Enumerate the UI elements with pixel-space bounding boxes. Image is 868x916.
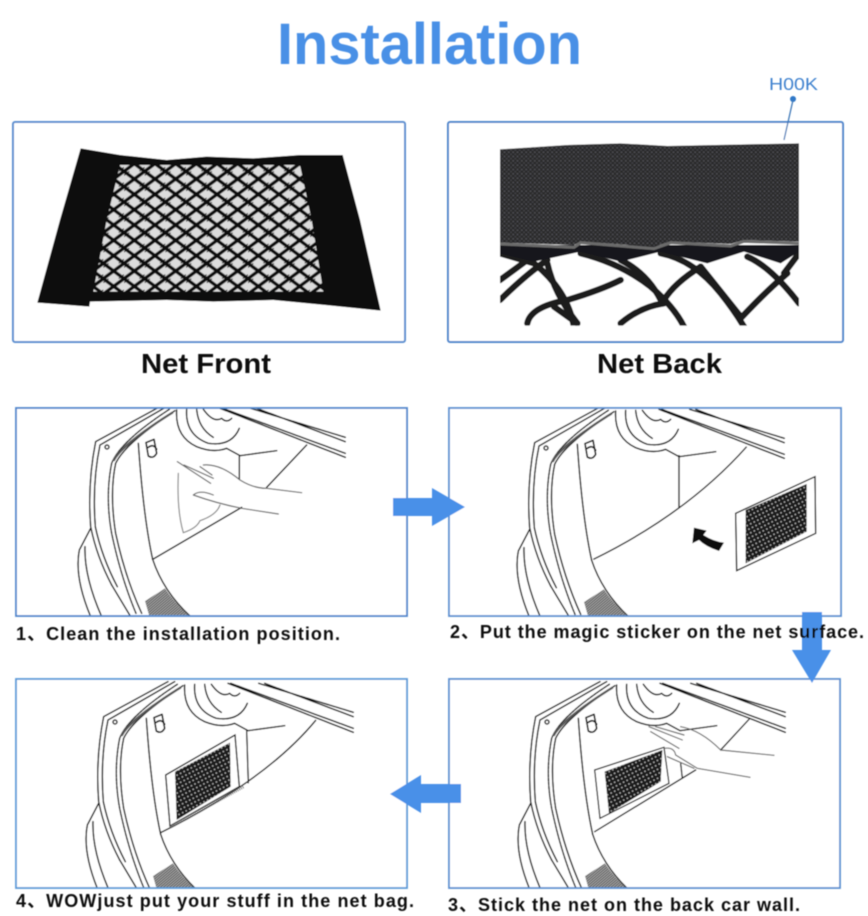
arrow: step 1 to step 2 <box>393 488 465 526</box>
net front photo <box>37 148 381 311</box>
callout: hook: H00K <box>769 74 818 94</box>
caption: step 1: 1、Clean the installation position. <box>16 624 340 644</box>
icon: installed net <box>166 735 243 827</box>
label: net back: Net Back <box>597 348 722 379</box>
icon: small black arrow <box>692 528 724 551</box>
callout: hook <box>769 74 818 140</box>
icon: net with magic sticker <box>736 477 816 571</box>
panel: net back <box>448 122 843 342</box>
net back photo <box>500 143 799 327</box>
illustration: step 1 car trunk <box>78 407 345 617</box>
arrow: step 3 to step 4 <box>390 775 461 813</box>
illustration: step 3 sticking net <box>518 682 785 892</box>
arrow: step 2 to step 3 <box>792 612 831 683</box>
panel: step 2 <box>449 408 841 618</box>
illustration: step 4 net installed <box>86 682 353 892</box>
panel: net front <box>13 122 405 342</box>
panel: step 3 <box>449 679 840 892</box>
title: Installation <box>277 12 582 77</box>
caption: step 2: 2、Put the magic sticker on the net surface. <box>450 622 864 642</box>
illustration: step 2 car trunk with net <box>517 408 816 618</box>
caption: step 3: 3、Stick the net on the back car wall. <box>448 895 800 915</box>
label: net front: Net Front <box>141 348 271 379</box>
caption: step 4: 4、WOWjust put your stuff in the net bag. <box>16 891 414 911</box>
panel: step 1 <box>16 407 407 617</box>
panel: step 4 <box>16 679 407 892</box>
icon: net on wall <box>595 747 669 818</box>
